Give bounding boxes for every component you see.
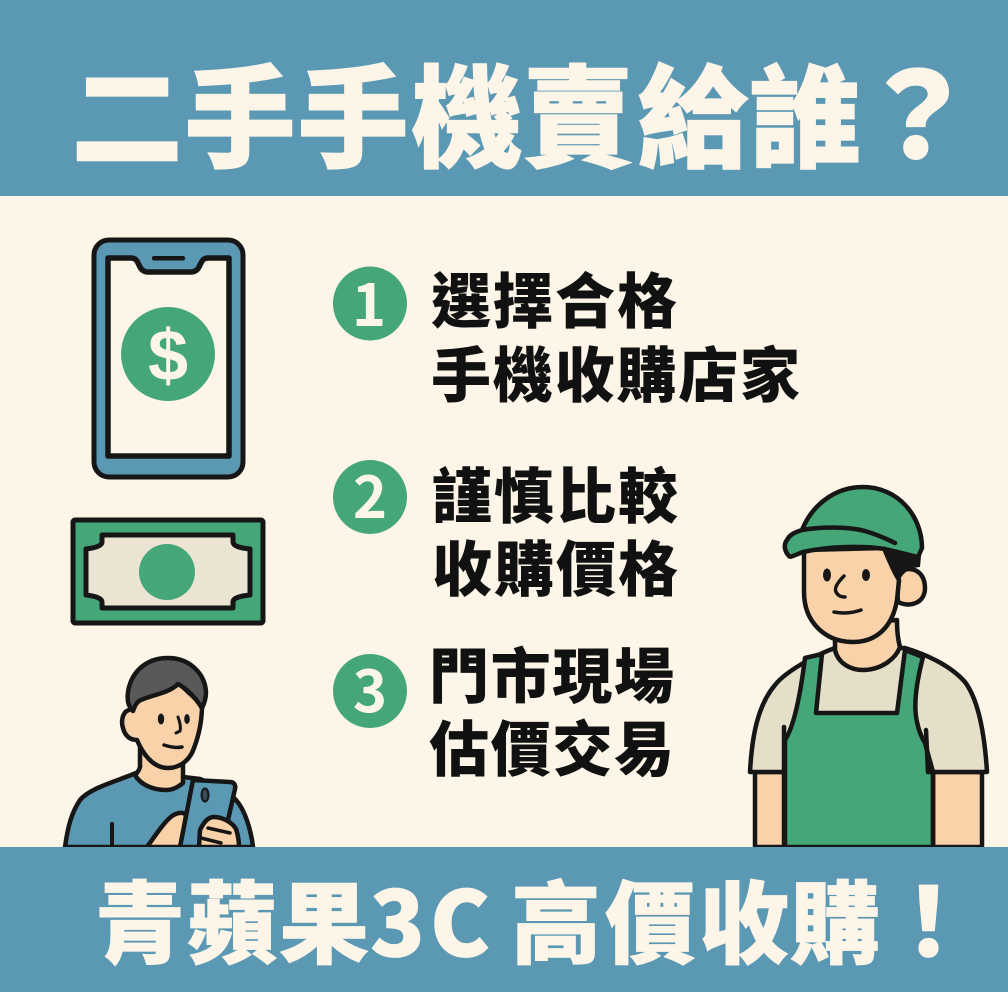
title: ？ — [858, 21, 976, 192]
step 2 text: 謹慎比較 — [432, 449, 678, 536]
icon: phone with dollar: $ — [148, 316, 188, 396]
step 3 text — [429, 629, 674, 789]
step 3 badge: 3 — [353, 645, 387, 729]
step 2 badge: 2 — [353, 451, 387, 535]
step 1 text — [431, 254, 800, 415]
step 2 text: 收購價格 — [432, 522, 678, 609]
step 1 text: 選擇合格 — [431, 254, 677, 341]
footer banner — [0, 847, 1008, 992]
icon: customer holding phone — [65, 658, 253, 847]
step 2 badge — [333, 451, 407, 535]
footer slogan: ！ — [881, 847, 976, 984]
step 1 badge: 1 — [352, 259, 386, 343]
step 3 badge — [333, 645, 407, 729]
step 2 text — [432, 449, 678, 609]
step 1 text: 手機收購店家 — [431, 328, 800, 415]
step 3 text: 門市現場 — [429, 629, 674, 716]
header banner — [0, 0, 1008, 196]
step 3 text: 估價交易 — [429, 702, 674, 789]
footer slogan: 青蘋果3C 高價收購 — [95, 852, 880, 982]
title: 二手手機賣給誰 — [72, 29, 861, 190]
illustration: shop clerk in green apron — [750, 487, 987, 847]
step 1 badge — [333, 259, 407, 343]
icon: phone with dollar — [94, 240, 243, 477]
icon: banknote — [73, 520, 263, 623]
